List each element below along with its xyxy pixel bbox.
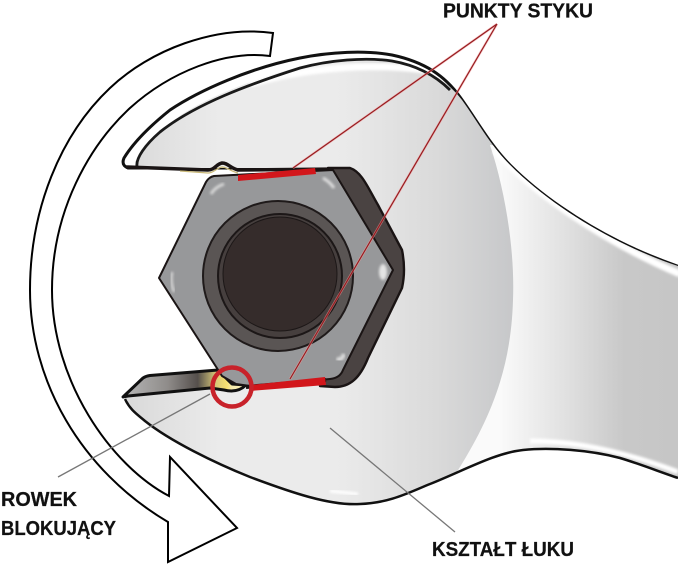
highlights: [250, 67, 425, 84]
leader line: arc shape: [330, 428, 455, 532]
wrench inner top outline: [137, 59, 450, 166]
hex nut: [159, 168, 404, 387]
rotation arrow: [30, 32, 273, 562]
locking groove ring: [212, 368, 252, 406]
nut dark side: [320, 168, 404, 387]
label: arc shape: KSZTAŁT ŁUKU: [432, 538, 574, 561]
wrench body: [120, 50, 678, 510]
wrench head fill: [120, 50, 678, 510]
nut corner glints: [211, 184, 224, 194]
leader line: locking groove: [58, 394, 210, 477]
label: locking groove: BLOKUJĄCY: [1, 517, 116, 540]
wrench outer outline: [123, 52, 678, 400]
bottom contact dark line: [246, 380, 326, 387]
label: locking groove: ROWEK: [1, 488, 77, 511]
label: contact points: PUNKTY STYKU: [443, 0, 593, 22]
contact point: upper: [238, 168, 316, 181]
wrench lower outline: [125, 399, 678, 504]
lower jaw face: [123, 370, 246, 397]
leader lines: contact points: [290, 24, 497, 379]
nut bore: [203, 201, 353, 351]
contact point: lower: [250, 377, 326, 391]
nut gray face: [159, 170, 393, 386]
upper jaw lip: [126, 163, 340, 170]
label: locking groove: [1, 488, 116, 540]
